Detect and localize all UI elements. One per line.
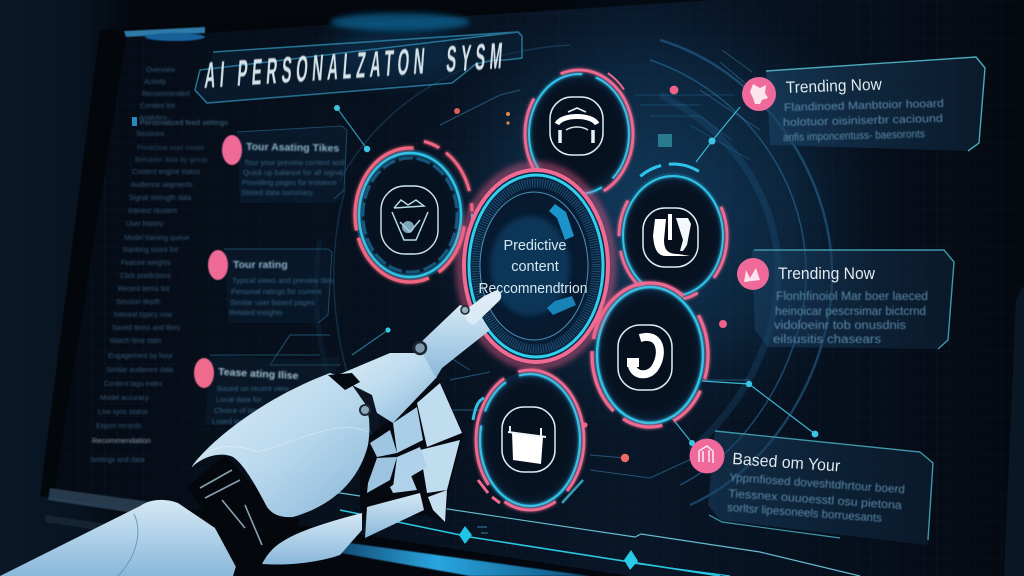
side menu list: Audience segments: [131, 182, 193, 189]
panel body: eilsusitis chasears: [773, 334, 881, 346]
left item 3 body: Choice of items: [214, 406, 266, 415]
icon: crown emblem: [381, 186, 438, 254]
index finger tip: [463, 290, 501, 325]
left item 2 body: Related insights: [229, 308, 283, 317]
panel body: Flonhfinoiol Mar boer laeced: [776, 291, 928, 303]
thumb base: [262, 513, 362, 565]
left item 1 body: Quick up balance for all signal: [243, 168, 343, 177]
central label: [478, 238, 588, 297]
bottom hud lines and diamonds: [320, 490, 860, 576]
side menu list: Content tags index: [104, 381, 163, 388]
back of hand: [333, 353, 437, 423]
panel body: Flandinoed Manbtoior hooard: [784, 98, 944, 114]
left item 2 body: Typical views and preview tiles: [232, 276, 334, 285]
side menu list: [90, 67, 228, 464]
panel: left item 1: [222, 126, 347, 203]
curled fingers: [367, 383, 462, 493]
side menu list: Predictive user model: [137, 145, 205, 152]
side menu list: Model training queue: [124, 235, 189, 242]
panel: left item 3: [194, 355, 340, 426]
side menu list: Analytics: [139, 115, 168, 122]
wrist joint: [187, 455, 300, 567]
left item 1 body: Providing pages for instance: [242, 178, 337, 187]
side menu list: Overview: [146, 67, 176, 74]
forearm: [0, 500, 237, 576]
hud circle: lower right: [592, 283, 708, 427]
bottom bezel with blue glow: [45, 488, 590, 576]
side menu list: Interest topics now: [114, 312, 173, 319]
concentric hud arcs: [316, 40, 832, 505]
thumb tip: [428, 490, 447, 522]
panel body: holotuor oisiniserbr caciound: [783, 113, 943, 129]
panel body: Ypprnfiosed doveshtdhrtour boerd: [729, 472, 905, 496]
side menu list: User history: [126, 221, 164, 228]
icon: hook symbol: [618, 325, 672, 390]
knuckle joints: [328, 373, 360, 390]
thumb: [365, 493, 424, 538]
side menu list: Feature weights: [121, 260, 171, 267]
left item 2 heading: Tour rating: [233, 259, 288, 271]
central label: Reccomnendtrion: [478, 281, 588, 297]
panel heading: Trending Now: [786, 76, 882, 97]
hud circle: upper right: [616, 164, 730, 300]
central circle: predictive content recommendation: [460, 166, 612, 366]
panel body: anfis imponcentuss- baesoronts: [783, 128, 925, 144]
hud circle: bottom: [473, 370, 584, 510]
icon: left item 1: [222, 135, 242, 165]
icon: u-shaped seat: [643, 208, 698, 267]
icon: box with handles: [502, 407, 555, 472]
side menu list: Session depth: [116, 299, 160, 306]
side menu list: Ranking score list: [123, 247, 178, 254]
panel: based on your: [690, 431, 933, 545]
panel body: [727, 472, 905, 525]
icon: pink badge bottom: [690, 438, 724, 474]
left item 3 body: Listed topics: [212, 417, 254, 426]
side menu list: Recent items list: [118, 286, 169, 293]
title banner: [195, 30, 522, 103]
central label: Predictive: [504, 238, 566, 254]
side menu list: Interest clusters: [128, 208, 178, 215]
icon: left item 2: [208, 250, 228, 280]
left item 3 body: Based on recent view: [217, 384, 289, 393]
left item 3 body: Local data for: [216, 395, 262, 404]
side menu list: Recommended: [142, 91, 190, 98]
top edge glow bar: [124, 13, 470, 77]
side menu list: Behavior data by group: [135, 157, 207, 164]
icon: pink badge top: [742, 77, 776, 111]
side menu list: Settings and data: [90, 457, 145, 464]
index finger middle: [418, 305, 490, 378]
side menu list: Watch time stats: [110, 338, 162, 345]
left item 3 heading: Tease ating Ilise: [218, 366, 299, 382]
finger backing: [360, 380, 463, 522]
side menu list: Signal strength data: [129, 195, 191, 202]
side menu list: Engagement by hour: [108, 353, 174, 360]
side menu list: Recommendation: [92, 436, 151, 445]
side menu list: Similar audience data: [106, 367, 173, 374]
side menu list: Sessions: [136, 131, 165, 138]
panel body: [783, 98, 944, 144]
hud circle: top: [522, 64, 636, 198]
panel: left item 2: [208, 249, 334, 323]
side menu list: Click predictions: [120, 273, 171, 280]
panel: trending now middle: [737, 250, 954, 349]
title text: AI PERSONALZATON SYSM: [203, 35, 504, 97]
panel body: vidoloeinr tob onusdnis: [774, 320, 906, 332]
active menu marker: [132, 117, 137, 126]
side menu list: Export records: [96, 423, 142, 430]
side menu list: Content list: [140, 103, 175, 110]
side menu list: Live sync status: [98, 409, 148, 416]
left item 1 body: [241, 158, 344, 197]
icon: pink badge middle: [737, 258, 769, 290]
icon: headset arch: [550, 97, 603, 155]
panel body: [773, 291, 928, 346]
robot hand: [0, 290, 501, 576]
side menu list: Content engine status: [132, 169, 201, 176]
side menu list: Activity: [144, 79, 167, 86]
icon: left item 3: [194, 358, 214, 388]
side menu list: Model accuracy: [100, 395, 150, 402]
palm: [192, 373, 369, 517]
central label: content: [511, 259, 559, 275]
panel body: sorltsr lipesoneels borruesants: [727, 502, 882, 525]
left item 2 body: Similar user based pages: [230, 298, 315, 307]
side menu list: Personalized feed settings: [140, 118, 228, 127]
panel: trending now top: [742, 57, 985, 151]
panel heading: Trending Now: [778, 265, 875, 283]
panel heading: Based om Your: [732, 450, 841, 476]
left item 1 body: Stored data summary: [241, 188, 313, 197]
left item 1 body: Tour your preview content and: [244, 158, 344, 167]
side menu list: Saved items and likes: [112, 325, 181, 332]
panel body: heinoicar pescrsimar bictcrnd: [775, 306, 926, 318]
hud circle: left: [348, 140, 472, 286]
left item 1 heading: Tour Asating Tikes: [246, 141, 339, 155]
connector lines and dots: [270, 86, 818, 478]
left item 2 body: Personal ratings for current: [231, 287, 322, 296]
left item 3 body: [212, 384, 289, 426]
left item 2 body: [229, 276, 334, 317]
panel body: Tiessnex ouuoesstl osu pietona: [728, 488, 903, 512]
